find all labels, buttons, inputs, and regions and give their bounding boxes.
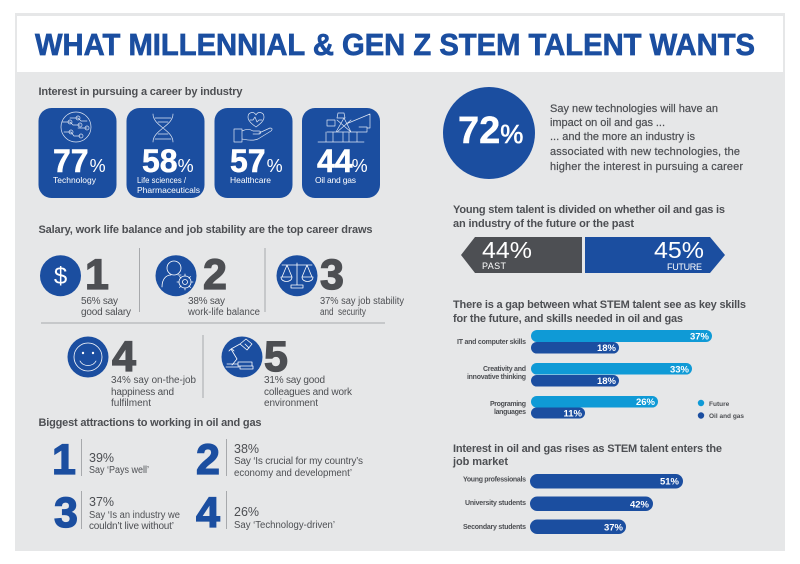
card: technology [38, 108, 116, 198]
icon: scales [281, 263, 313, 288]
bars: creativity: innovative thinking [467, 374, 526, 381]
value: 77%: 77% [53, 143, 106, 179]
label: healthcare: Healthcare [230, 175, 271, 185]
text: colleagues: 31% say good [264, 375, 325, 386]
attraction 3 [54, 489, 180, 537]
bar: university students: 42% [630, 500, 650, 510]
value: 26%: 26% [234, 505, 259, 519]
panel: skills gap chart [453, 299, 746, 420]
text: crucial: Say ‘Is crucial for my country’s [234, 456, 363, 467]
heading: skills gap: There is a gap between what STEM talent see as key skills [453, 299, 746, 311]
text: colleagues line 2: colleagues and work [264, 387, 353, 398]
callout text: associated with new technologies, the [550, 146, 740, 158]
title banner [17, 16, 783, 72]
draw 3: job stability [276, 251, 404, 318]
icon: hand holding heart [234, 113, 272, 142]
rank 3: 3 [320, 251, 344, 299]
heading: skills gap [453, 299, 746, 325]
bars: programing languages: 11% [564, 408, 583, 420]
bar: secondary students [463, 520, 626, 534]
bar: university students [465, 496, 653, 511]
title banner: WHAT MILLENNIAL & GEN Z STEM TALENT WANTS [35, 27, 755, 62]
text: happiness line 3: fulfilment [111, 398, 151, 409]
heading: interest rises [452, 443, 722, 468]
label: technology: Technology [53, 175, 97, 185]
bar: secondary students: Secondary students [463, 524, 526, 531]
draw 4: happiness [68, 333, 196, 409]
attraction 4 [196, 489, 335, 537]
callout text: Say new technologies will have an [550, 103, 718, 115]
panel: biggest attractions [38, 417, 363, 537]
value: 44%: 44% [317, 143, 368, 179]
callout text: ... and the more an industry is [550, 131, 696, 143]
bar: young professionals: 51% [660, 476, 680, 488]
bars: IT and computer skills: IT and computer skills [457, 339, 526, 346]
arrow: future 45% [585, 237, 725, 273]
value: 39%: 39% [89, 451, 114, 465]
label: oil and gas: Oil and gas [315, 175, 356, 185]
panel: interest rises chart [452, 443, 722, 534]
bars: creativity: 33% [670, 364, 690, 376]
heading: interest rises: Interest in oil and gas rises as STEM talent enters the [453, 443, 722, 455]
heading: future or past: Young stem talent is divided on whether oil and gas is [453, 204, 725, 216]
callout text: impact on oil and gas ... [550, 117, 665, 129]
bars: programing languages [490, 396, 658, 420]
value: 38%: 38% [234, 442, 259, 456]
text: pays well: Say ‘Pays well’ [89, 465, 149, 476]
heading: future or past: an industry of the future or the past [453, 218, 634, 230]
bars: programing languages: 26% [636, 397, 656, 408]
rank 4: 4 [112, 333, 136, 381]
arrow: past 44% [461, 237, 582, 273]
legend: Oil and gas [709, 413, 744, 420]
arrow: future 45%: 45% [654, 237, 704, 263]
text: crucial line 2: economy and development’ [234, 468, 352, 479]
value: 72%: 72% [458, 110, 523, 152]
icon: dollar: $ [54, 263, 67, 290]
attraction 1 [52, 436, 149, 484]
attraction 3: 3 [54, 489, 78, 537]
callout text [550, 103, 743, 173]
icon: desk lamp and books [226, 339, 253, 369]
panel: top career draws [38, 224, 404, 409]
icon: person and gear [162, 261, 193, 290]
bars: IT and computer skills: 18% [597, 343, 617, 354]
attraction 1: 1 [52, 436, 76, 484]
attraction 2 [196, 436, 363, 484]
icon: dna helix [153, 114, 173, 142]
bar: secondary students: 37% [604, 522, 624, 534]
rank 2: 2 [203, 251, 227, 299]
icon: oil rig [318, 113, 370, 142]
panel: 72 percent callout [443, 87, 743, 179]
icon: smiley [74, 343, 102, 371]
rank 1: 1 [85, 251, 109, 299]
bars: creativity: Creativity and [483, 366, 526, 373]
text: job stability line 2: and security [320, 307, 366, 318]
bar: young professionals [463, 474, 683, 488]
draw 2: work-life balance [156, 251, 260, 318]
bars: programing languages: languages [494, 409, 526, 416]
text: work-life balance: 38% say [188, 296, 225, 307]
text: job stability: 37% say job stability [320, 296, 404, 307]
text: colleagues line 3: environment [264, 398, 318, 409]
arrow: past 44%: 44% [482, 237, 532, 263]
panel: future or past [453, 204, 725, 273]
text: happiness line 2: happiness and [111, 387, 174, 398]
attraction 4: 4 [196, 489, 220, 537]
arrow: future 45%: FUTURE [667, 262, 702, 272]
bars: programing languages: Programing [490, 401, 526, 408]
text: good salary line 2: good salary [81, 307, 131, 318]
value: 58%: 58% [142, 143, 194, 179]
value: 37%: 37% [89, 495, 114, 509]
heading: biggest attractions: Biggest attractions to working in oil and gas [38, 417, 262, 429]
bars: creativity [467, 363, 692, 387]
draw 5: colleagues [222, 333, 353, 409]
heading: interest by industry: Interest in pursuing a career by industry [38, 86, 243, 98]
text: work-life balance line 2: work-life balance [187, 307, 260, 318]
heading: top career draws: Salary, work life balance and job stability are the top career draws [38, 224, 372, 236]
attraction 2: 2 [196, 436, 220, 484]
arrow: past 44%: PAST [482, 261, 506, 271]
heading: interest rises: job market [452, 456, 508, 468]
legend [698, 400, 744, 420]
heading: skills gap: for the future, and skills needed in oil and gas [453, 313, 683, 325]
bars: creativity: 18% [597, 376, 617, 387]
bar: university students: University students [465, 500, 526, 507]
label: pharmaceuticals: Pharmaceuticals [137, 185, 200, 195]
bars: IT and computer skills [457, 330, 712, 354]
heading: future or past [453, 204, 725, 230]
text: live without line 2: couldn’t live without’ [89, 521, 174, 532]
callout text: higher the interest in pursuing a career [550, 161, 743, 173]
bar: young professionals: Young professionals [463, 476, 526, 484]
text: happiness: 34% say on-the-job [111, 375, 196, 386]
draw 1: salary [40, 251, 131, 318]
panel: interest by industry [38, 86, 380, 198]
legend: Future [709, 401, 730, 408]
icon: circuit globe [61, 112, 91, 142]
bars: IT and computer skills: 37% [690, 332, 710, 342]
value: 57%: 57% [230, 143, 283, 179]
label: life sciences: Life sciences / [137, 175, 187, 185]
card: oil and gas [302, 108, 380, 198]
card: healthcare [214, 108, 292, 198]
text: technology-driven: Say ‘Technology-driven’ [234, 520, 335, 531]
card: life sciences [126, 108, 204, 198]
text: live without: Say ‘Is an industry we [89, 510, 180, 521]
rank 5: 5 [264, 333, 288, 381]
text: good salary: 56% say [81, 296, 118, 307]
